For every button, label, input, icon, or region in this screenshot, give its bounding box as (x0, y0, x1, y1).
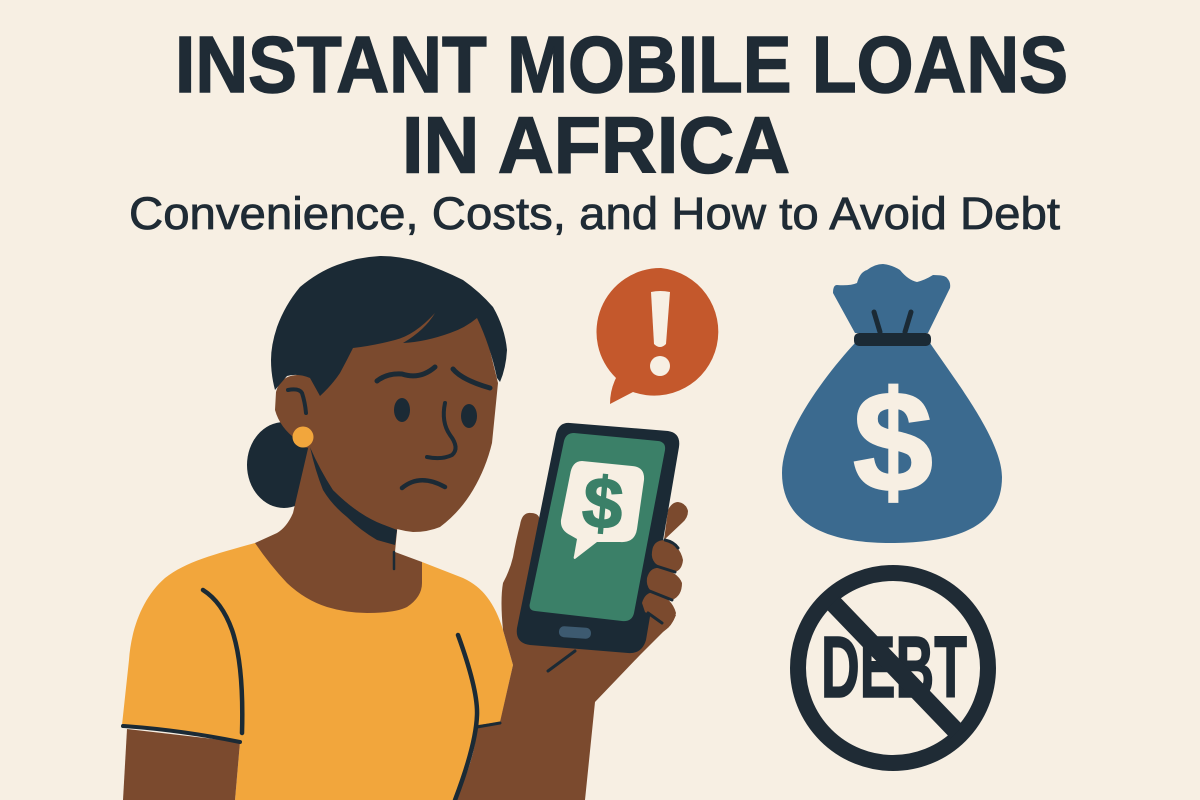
shirt seams (123, 590, 500, 800)
icon: alert speech bubble (596, 268, 718, 404)
icon: no debt sign (798, 573, 988, 763)
eyebrows (377, 367, 435, 381)
earring (292, 426, 314, 448)
neck (255, 440, 422, 613)
fingers (642, 540, 683, 628)
eyes (394, 398, 410, 422)
neck crease (393, 552, 395, 569)
home button (559, 626, 591, 639)
nose (427, 403, 456, 458)
left arm (123, 729, 240, 800)
face (275, 300, 498, 532)
icon: money bag: $ (853, 363, 933, 522)
wrist crease (548, 651, 575, 671)
title (175, 20, 1068, 190)
hair (271, 256, 507, 396)
title: IN AFRICA (402, 100, 790, 190)
phone (517, 423, 679, 653)
hair bun (247, 422, 321, 508)
mouth (402, 480, 445, 488)
phone screen (530, 433, 665, 621)
chat bubble with dollar: $ (579, 462, 626, 546)
title: INSTANT MOBILE LOANS (175, 20, 1068, 109)
subtitle: Convenience, Costs, and How to Avoid Debt (129, 188, 1061, 239)
icon: money bag (782, 264, 1002, 543)
shirt (122, 540, 513, 800)
hand and forearm (455, 513, 676, 800)
icon: no debt sign: DEBT (821, 619, 967, 716)
chat bubble with dollar (561, 461, 644, 559)
ear detail (288, 389, 306, 413)
phone body (517, 423, 679, 653)
illustration: worried woman holding phone (122, 256, 688, 800)
neck shadow (310, 447, 397, 545)
index finger (664, 502, 688, 540)
